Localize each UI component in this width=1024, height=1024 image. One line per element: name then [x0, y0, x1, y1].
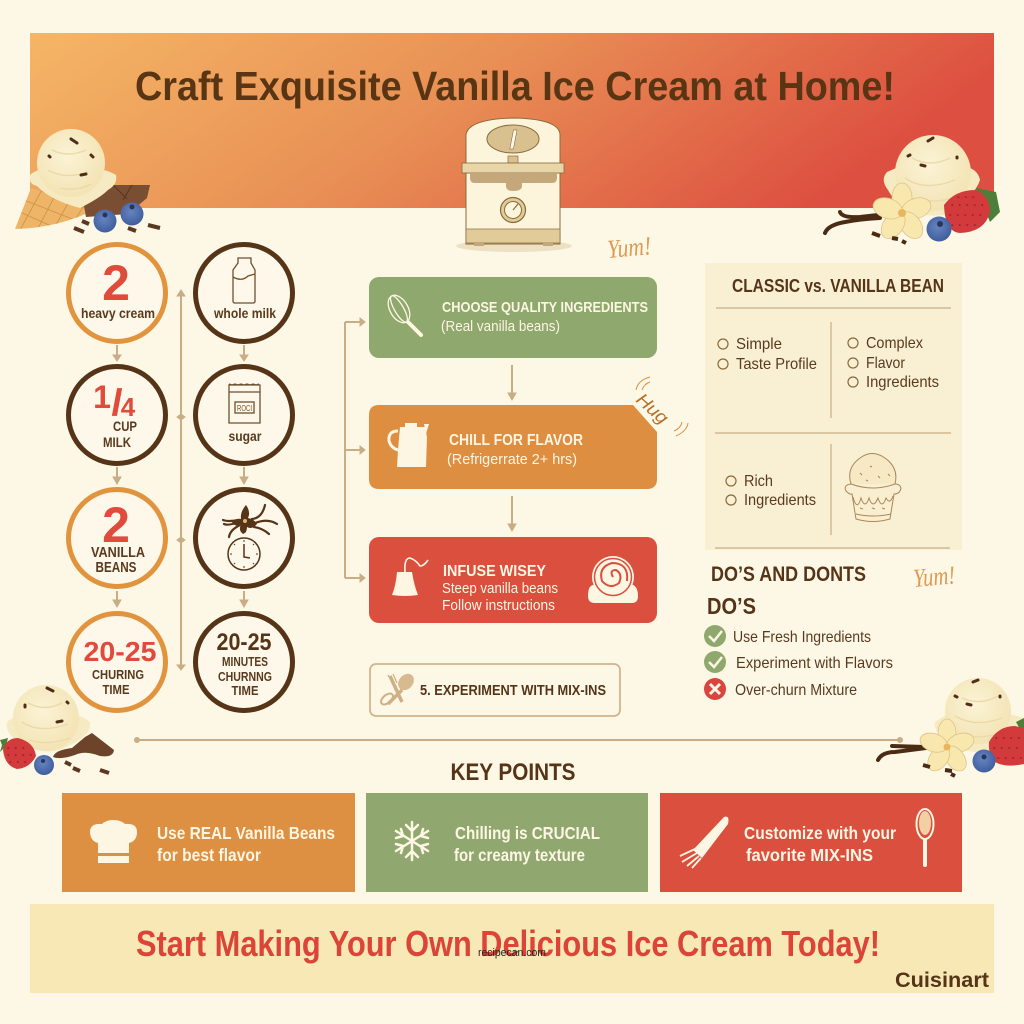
ingredient circle: churing time: [68, 614, 166, 710]
step 5: experiment with mix-ins: [370, 664, 620, 716]
watermark: recipecan.com: [478, 947, 546, 959]
flower: [870, 183, 934, 243]
scoop: bottom left: [0, 685, 114, 775]
ingredient circle: vanilla beans: [68, 490, 166, 586]
ingredient circle: churing time: TIME: [102, 682, 130, 697]
ingredient circle: quarter cup milk: 1: [93, 379, 111, 415]
ingredient circle: quarter cup milk: MILK: [103, 434, 131, 450]
step 2: chill for flavor: (Refrigerrate 2+ hrs): [447, 452, 577, 468]
dont item: over-churn mixture: Over-churn Mixture: [735, 682, 857, 699]
brand logo: Cuisinart: [895, 969, 989, 992]
panel: classic vs vanilla bean: Rich: [744, 473, 773, 490]
panel: classic vs vanilla bean: Taste Profile: [736, 356, 817, 373]
scribble note on step 2 corner: [632, 377, 688, 436]
double arrow between columns: [177, 290, 185, 670]
icon: chef hat: [90, 820, 137, 863]
ingredient circle: sugar: ROCI: [237, 404, 252, 413]
panel: call to action: [30, 904, 994, 993]
step 3: infuse wisely: Steep vanilla beans: [442, 581, 558, 597]
ingredient circle: sugar: sugar: [228, 429, 262, 444]
icon: pitcher: [389, 423, 429, 467]
heading: key points: KEY POINTS: [450, 759, 576, 786]
heading: do's and donts: DO’S AND DONTS: [711, 563, 866, 586]
ingredient circle: minutes churning time: [196, 614, 292, 710]
scoop: top right: [825, 135, 1000, 243]
ingredient circle: minutes churning time: MINUTES: [222, 655, 268, 669]
handwritten: yum top: Yum!: [606, 231, 652, 264]
panel: classic vs vanilla bean: Flavor: [866, 355, 906, 372]
ingredient circle: churing time: CHURING: [92, 667, 144, 682]
icon: snowflake: [396, 822, 428, 860]
title: Craft Exquisite Vanilla Ice Cream at Home!: [135, 63, 895, 109]
do item: experiment with flavors: Experiment with Flavors: [736, 655, 893, 672]
step 1: choose quality ingredients: [369, 277, 657, 358]
step 3: infuse wisely: [369, 537, 657, 623]
panel: classic vs vanilla bean: CLASSIC vs. VANILLA BEAN: [732, 276, 944, 296]
key point: mix-ins: favorite MIX-INS: [746, 845, 873, 865]
key point: vanilla beans: for best flavor: [157, 845, 261, 865]
key point: vanilla beans: [62, 793, 355, 892]
ingredient circle: vanilla beans: BEANS: [96, 560, 137, 576]
arrow: step 2 to 3: [508, 496, 516, 531]
icon: ice cream maker: [456, 118, 572, 252]
panel: classic vs vanilla bean: Ingredients: [866, 374, 939, 391]
icon: ice cream maker: l: [509, 125, 517, 155]
panel: call to action: Start Making Your Own Delicious Ice Cream Today!: [136, 923, 880, 964]
key point: chilling: Chilling is CRUCIAL: [455, 823, 600, 843]
ingredient circle: minutes churning time: 20-25: [216, 629, 272, 656]
dont item: over-churn mixture: [704, 678, 857, 700]
scribble note on step 2 corner: Hug: [632, 389, 672, 428]
ingredient circle: churing time: 20-25: [84, 636, 156, 667]
step 5: experiment with mix-ins: 5. EXPERIMENT WITH MIX-INS: [420, 682, 606, 699]
ingredient circle: vanilla beans: VANILLA: [91, 545, 145, 561]
flower: [918, 719, 976, 775]
ingredient circle: heavy cream: heavy cream: [81, 306, 155, 321]
ingredient circle: heavy cream: [68, 244, 166, 342]
handwritten: yum right: Yum!: [912, 560, 956, 593]
scoop: top left: [15, 129, 160, 232]
icon: tea bag: [392, 558, 428, 596]
arrow: step 1 to 2: [508, 365, 516, 400]
ingredient circle: sugar: [196, 366, 292, 464]
ingredient circle: quarter cup milk: /: [112, 382, 122, 423]
ingredient circle: heavy cream: 2: [102, 255, 130, 311]
icon: crossed utensils: [379, 671, 417, 707]
step 1: choose quality ingredients: CHOOSE QUALITY INGREDIENTS: [442, 299, 648, 316]
heading: do's: DO’S: [707, 593, 756, 619]
header banner: [30, 33, 994, 208]
key point: chilling: for creamy texture: [454, 845, 585, 865]
step 2: chill for flavor: CHILL FOR FLAVOR: [449, 432, 583, 449]
ingredient circle: quarter cup milk: 4: [121, 392, 136, 422]
panel: classic vs vanilla bean: Complex: [866, 335, 923, 352]
icon: spoon: [916, 809, 934, 867]
icon: swirl roll: [588, 556, 638, 603]
icon: ice cream cup: [845, 454, 901, 522]
ingredient circle: quarter cup milk: CUP: [113, 418, 137, 434]
step 2: chill for flavor: [369, 405, 657, 489]
step 3: infuse wisely: Follow instructions: [442, 598, 555, 614]
do item: fresh ingredients: [704, 625, 871, 647]
key point: mix-ins: [660, 793, 962, 892]
panel: classic vs vanilla bean: [705, 263, 962, 550]
panel: classic vs vanilla bean: Ingredients: [744, 492, 816, 509]
ingredient circle: vanilla beans: 2: [102, 497, 130, 553]
do item: experiment with flavors: [704, 651, 893, 673]
icon: whisk brush: [680, 817, 728, 868]
arrows between ingredient circles: [113, 345, 248, 607]
ingredient circle: whole milk: [196, 244, 292, 342]
ingredient circle: quarter cup milk: [68, 366, 166, 464]
key point: mix-ins: Customize with your: [744, 823, 896, 843]
step 3: infuse wisely: INFUSE WISEY: [443, 563, 547, 580]
icon: whisk: [384, 292, 421, 335]
ingredient circle: minutes churning time: CHURNNG: [218, 670, 272, 684]
ingredient circle: vanilla and clock: [196, 490, 292, 586]
step 1: choose quality ingredients: (Real vanilla beans): [441, 319, 560, 335]
ingredient circle: minutes churning time: TIME: [232, 684, 258, 698]
ingredient circle: whole milk: whole milk: [213, 306, 276, 321]
timeline line: [134, 737, 903, 743]
scoop: bottom right: [878, 678, 1024, 776]
panel: classic vs vanilla bean: Simple: [736, 336, 782, 353]
key point: chilling: [366, 793, 648, 892]
step bracket arrows: [345, 318, 365, 582]
key point: vanilla beans: Use REAL Vanilla Beans: [157, 823, 335, 843]
do item: fresh ingredients: Use Fresh Ingredients: [733, 629, 871, 646]
